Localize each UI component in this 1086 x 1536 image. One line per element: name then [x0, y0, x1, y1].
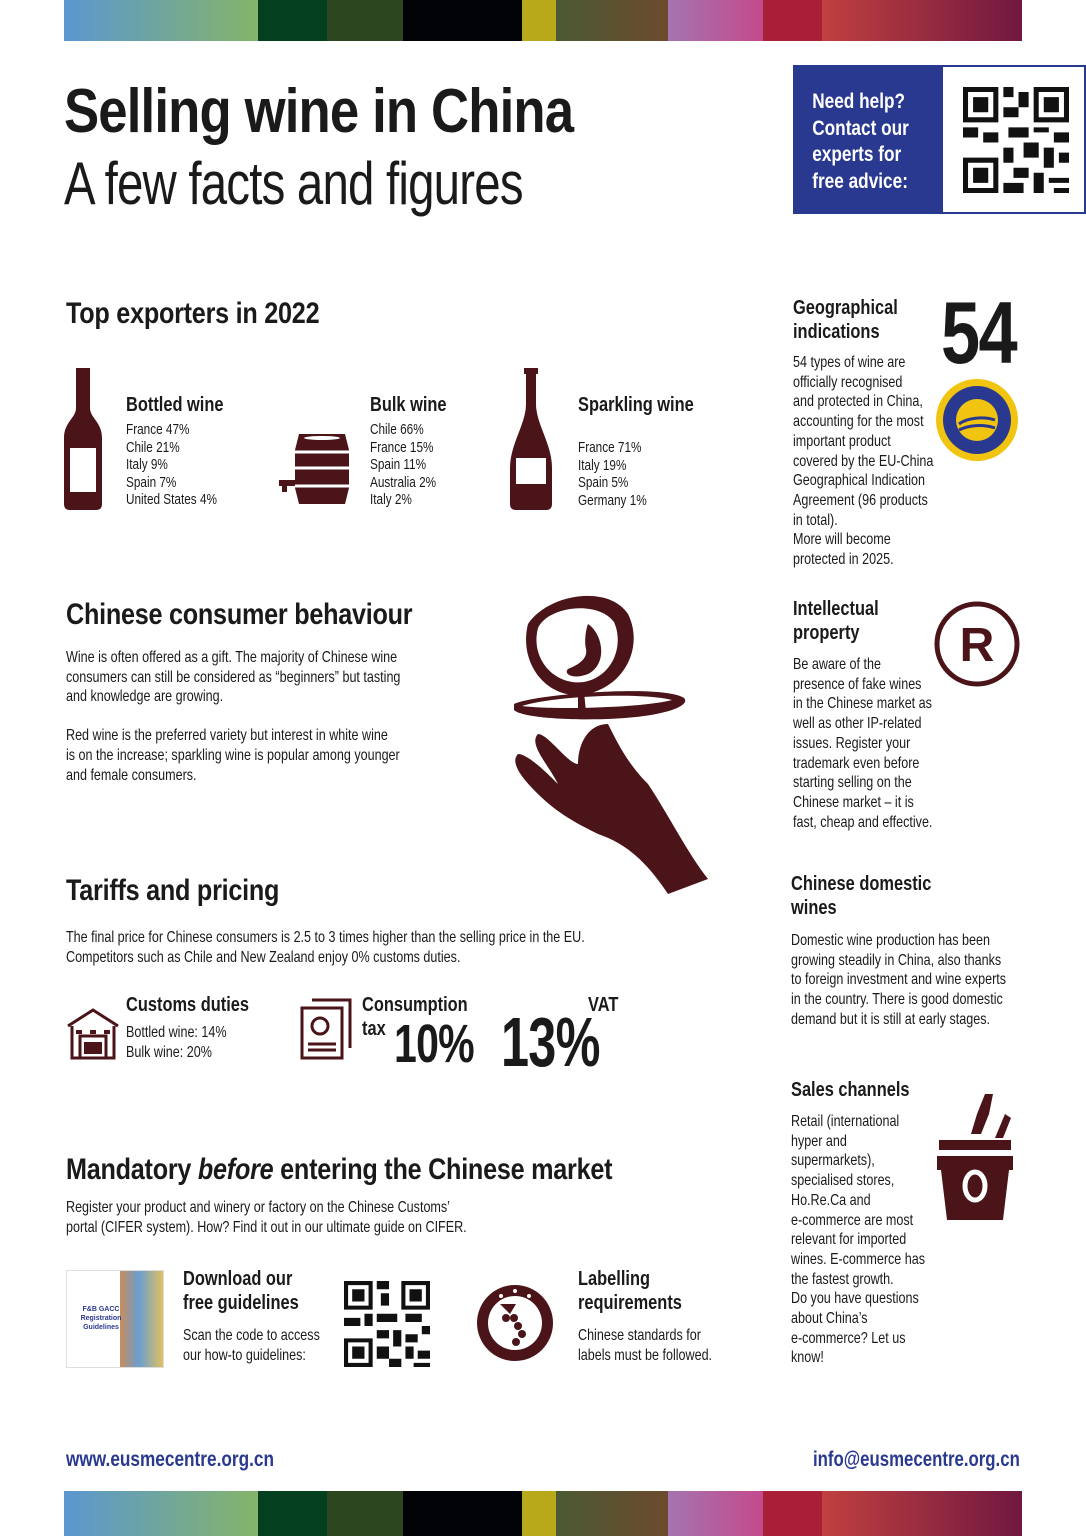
- title: A few facts and figures: [64, 150, 523, 217]
- text: tariffs: [66, 929, 585, 966]
- panel: geographical indications: Geographical Indication: [793, 472, 925, 489]
- labelling requirements: labels must be followed.: [578, 1347, 712, 1364]
- sparkling wine: Germany 1%: [578, 492, 647, 508]
- title: Selling wine in China: [64, 77, 573, 146]
- icon: customs house: [67, 1008, 119, 1060]
- heading: top exporters: Top exporters in 2022: [66, 297, 319, 330]
- sparkling wine: Sparkling wine: [578, 394, 694, 416]
- panel: sales channels: e-commerce? Let us: [791, 1330, 905, 1347]
- panel: intellectual property: property: [793, 622, 860, 644]
- panel: domestic wines: demand but it is still at early stages.: [791, 1011, 990, 1028]
- panel: intellectual property: trademark even before: [793, 755, 919, 772]
- consumption tax: tax: [362, 1018, 386, 1040]
- panel: domestic wines: Chinese domestic: [791, 873, 931, 895]
- download guidelines: free guidelines: [183, 1292, 299, 1314]
- labelling requirements: requirements: [578, 1292, 682, 1314]
- panel: intellectual property: Be aware of the: [793, 656, 881, 673]
- icon: hand holding glass: [514, 596, 708, 894]
- text: consumer: Red wine is the preferred variety but interest in white wine: [66, 727, 388, 744]
- panel: geographical indications: [793, 297, 934, 568]
- panel: intellectual property: in the Chinese market as: [793, 695, 932, 712]
- sparkling wine: [578, 394, 694, 508]
- heading: mandatory: Mandatory before entering the Chinese market: [66, 1153, 612, 1186]
- heading: consumer behaviour: Chinese consumer behaviour: [66, 598, 412, 631]
- download guidelines: Download our: [183, 1268, 292, 1290]
- customs duties: Customs duties: [126, 994, 249, 1016]
- icon: label seal: [477, 1285, 553, 1361]
- footer email: info@eusmecentre.org.cn: [813, 1448, 1020, 1471]
- icon: PGI seal: [936, 379, 1018, 461]
- text: consumer: consumers can still be considered as “beginners” but tasting: [66, 669, 400, 686]
- guideline cover: [66, 1270, 164, 1368]
- sparkling wine: France 71%: [578, 439, 641, 456]
- panel: geographical indications: covered by the EU-China: [793, 453, 933, 470]
- icon: registered: [934, 602, 1020, 686]
- sparkling wine: Spain 5%: [578, 474, 628, 491]
- bulk wine: Spain 11%: [370, 456, 426, 473]
- icon: documents: [300, 998, 352, 1060]
- icon: ice bucket: [937, 1094, 1013, 1220]
- consumption tax: [362, 994, 468, 1040]
- panel: geographical indications: important product: [793, 433, 891, 450]
- text: mandatory: Register your product and winery or factory on the Chinese Customs’: [66, 1199, 450, 1216]
- panel: geographical indications: in total).: [793, 512, 838, 529]
- panel: geographical indications: officially recognised: [793, 374, 902, 391]
- panel: intellectual property: presence of fake wines: [793, 676, 921, 693]
- contact box: Need help?: [812, 90, 905, 113]
- bottled wine: United States 4%: [126, 491, 217, 508]
- bottled wine: Bottled wine: [126, 394, 223, 416]
- icon: sparkling bottle: [510, 368, 552, 510]
- panel: domestic wines: in the country. There is good domestic: [791, 991, 1003, 1008]
- panel: sales channels: [791, 1079, 925, 1366]
- labelling requirements: Labelling: [578, 1268, 650, 1290]
- number 10%: 10%: [394, 1014, 474, 1074]
- icon: registered: R: [960, 619, 994, 672]
- contact box: [793, 65, 1086, 214]
- panel: sales channels: Do you have questions: [791, 1290, 919, 1307]
- panel: domestic wines: wines: [791, 897, 837, 919]
- bottom color bar: [64, 1491, 1022, 1536]
- text: mandatory: portal (CIFER system). How? Find it out in our ultimate guide on CIFER.: [66, 1219, 467, 1236]
- customs duties: Bottled wine: 14%: [126, 1024, 227, 1041]
- panel: sales channels: the fastest growth.: [791, 1271, 894, 1288]
- heading: tariffs: Tariffs and pricing: [66, 874, 279, 907]
- panel: geographical indications: protected in 2025.: [793, 551, 894, 568]
- panel: sales channels: hyper and: [791, 1133, 847, 1150]
- icon: barrel: [279, 434, 349, 504]
- panel: geographical indications: and protected in China,: [793, 393, 923, 410]
- contact box: free advice:: [812, 170, 908, 192]
- panel: domestic wines: growing steadily in China, also thanks: [791, 952, 1001, 969]
- panel: sales channels: relevant for imported: [791, 1231, 906, 1248]
- bulk wine: Chile 66%: [370, 421, 424, 438]
- bulk wine: Australia 2%: [370, 474, 436, 490]
- download guidelines: Scan the code to access: [183, 1327, 320, 1344]
- guideline cover: F&B GACC Registration Guidelines: [81, 1306, 121, 1331]
- text: tariffs: Competitors such as Chile and New Zealand enjoy 0% customs duties.: [66, 949, 460, 966]
- icon: QR code: [963, 87, 1069, 193]
- labelling requirements: [578, 1268, 712, 1364]
- bottled wine: Spain 7%: [126, 474, 176, 490]
- panel: intellectual property: [793, 598, 932, 831]
- VAT: VAT: [588, 994, 618, 1016]
- text: consumer: and knowledge are growing.: [66, 688, 223, 705]
- sparkling wine: Italy 19%: [578, 456, 626, 474]
- panel: sales channels: Ho.Re.Ca and: [791, 1192, 871, 1209]
- panel: domestic wines: [791, 873, 1006, 1028]
- bottled wine: [126, 394, 223, 508]
- customs duties: [126, 994, 249, 1061]
- consumption tax: Consumption: [362, 994, 468, 1016]
- labelling requirements: Chinese standards for: [578, 1327, 701, 1344]
- panel: geographical indications: accounting for the most: [793, 413, 924, 430]
- bulk wine: Bulk wine: [370, 394, 447, 416]
- panel: geographical indications: More will become: [793, 531, 891, 548]
- contact box: Contact our: [812, 116, 909, 140]
- panel: geographical indications: Geographical: [793, 297, 898, 319]
- panel: sales channels: about China’s: [791, 1310, 868, 1327]
- panel: sales channels: know!: [791, 1349, 824, 1366]
- title: [64, 77, 574, 217]
- customs duties: Bulk wine: 20%: [126, 1044, 212, 1061]
- bulk wine: Italy 2%: [370, 491, 412, 508]
- panel: intellectual property: issues. Register your: [793, 735, 910, 752]
- panel: geographical indications: Agreement (96 products: [793, 492, 928, 509]
- text: consumer: is on the increase; sparkling wine is popular among younger: [66, 747, 400, 764]
- icon: QR code 2: [344, 1281, 430, 1367]
- contact box: experts for: [812, 143, 901, 166]
- panel: domestic wines: to foreign investment and wine experts: [791, 971, 1006, 988]
- text: tariffs: The final price for Chinese consumers is 2.5 to 3 times higher than the selling price in the EU.: [66, 929, 585, 946]
- panel: intellectual property: Chinese market – it is: [793, 794, 914, 811]
- panel: intellectual property: starting selling on the: [793, 774, 912, 791]
- text: consumer: and female consumers.: [66, 767, 197, 784]
- panel: intellectual property: well as other IP-related: [793, 715, 921, 732]
- panel: intellectual property: Intellectual: [793, 598, 879, 620]
- bulk wine: [370, 394, 447, 508]
- panel: geographical indications: indications: [793, 321, 880, 343]
- top color bar: [64, 0, 1022, 41]
- bottled wine: Italy 9%: [126, 456, 168, 473]
- download guidelines: our how-to guidelines:: [183, 1347, 306, 1364]
- panel: sales channels: e-commerce are most: [791, 1212, 913, 1229]
- panel: sales channels: Sales channels: [791, 1079, 910, 1101]
- panel: sales channels: wines. E-commerce has: [791, 1251, 925, 1268]
- bulk wine: France 15%: [370, 438, 433, 456]
- panel: geographical indications: 54 types of wine are: [793, 354, 905, 371]
- panel: sales channels: supermarkets),: [791, 1152, 875, 1169]
- panel: intellectual property: fast, cheap and effective.: [793, 814, 932, 831]
- number 54: 54: [941, 283, 1016, 382]
- text: mandatory: [66, 1199, 467, 1236]
- bottled wine: France 47%: [126, 421, 189, 438]
- panel: sales channels: specialised stores,: [791, 1172, 894, 1189]
- panel: domestic wines: Domestic wine production has been: [791, 932, 990, 949]
- footer website: www.eusmecentre.org.cn: [66, 1448, 274, 1471]
- panel: sales channels: Retail (international: [791, 1113, 899, 1130]
- icon: bottle: [64, 368, 102, 510]
- text: consumer: Wine is often offered as a gift. The majority of Chinese wine: [66, 649, 397, 666]
- text: consumer: [66, 649, 400, 784]
- number 13%: 13%: [501, 1003, 600, 1081]
- bottled wine: Chile 21%: [126, 438, 180, 456]
- download guidelines: [183, 1268, 320, 1364]
